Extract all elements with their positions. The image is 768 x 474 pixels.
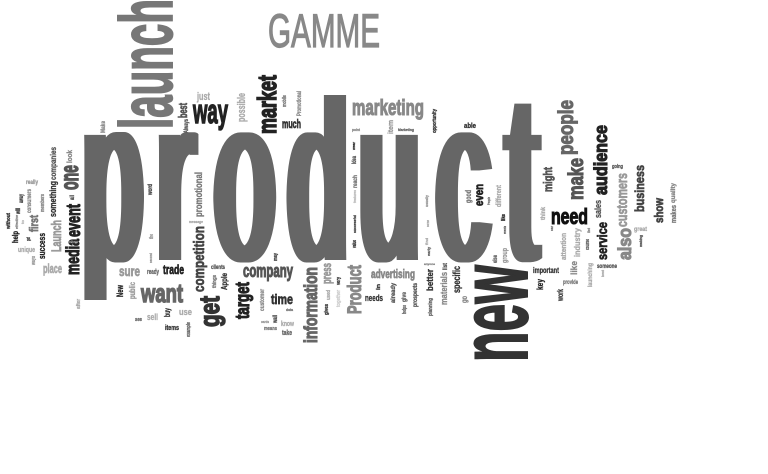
word group: lower centre: anyone (424, 262, 435, 266)
word group: upper left: just (196, 91, 210, 103)
word group: upper left: mobile (282, 95, 288, 107)
word group: far left cluster: consumers (27, 189, 33, 213)
word group: lower left: get (194, 296, 225, 327)
word group: right cluster: list (586, 227, 591, 233)
word group: right cluster: service (594, 222, 610, 260)
word group: upper centre: wear (351, 142, 356, 151)
word group: inside letters left: second (148, 253, 153, 263)
word group: upper centre: opportunity (432, 109, 438, 133)
word group: lower centre: cards (261, 319, 270, 324)
word group: lower left: trade (163, 262, 184, 277)
word group: right cluster: show (652, 197, 666, 223)
word group: right cluster: attention (561, 233, 568, 260)
word group: lower left: clients (211, 265, 225, 271)
word group: right cluster: great (634, 227, 647, 233)
word group: lower left: example (186, 322, 192, 337)
word group: upper centre: even (472, 184, 486, 206)
word group: upper centre: Marketing (398, 127, 414, 132)
word group: right cluster: business (632, 165, 647, 212)
word group: upper centre: successful (352, 215, 357, 233)
word group: right cluster: work (556, 289, 565, 302)
word group: lower centre: target (233, 282, 254, 319)
word group: right cluster: someone (597, 264, 618, 270)
word group: right cluster: quality (671, 182, 677, 203)
word group: far left cluster: first (27, 215, 41, 232)
word group: right cluster: makes (671, 205, 678, 223)
word group: right cluster: customers (614, 173, 631, 227)
word group: lower centre: advertising (371, 267, 415, 281)
word group: right cluster: car (549, 226, 554, 231)
word group: upper centre: usually (424, 194, 429, 207)
word group: far left cluster: media (63, 238, 83, 275)
word group: right cluster: making (638, 235, 643, 247)
word group: far left cluster: effective (14, 214, 19, 229)
word group: upper left: market (252, 75, 282, 134)
word group: lower centre: press (319, 263, 334, 284)
word group: right cluster: also (615, 228, 635, 260)
word group: right cluster: launching (588, 263, 594, 287)
word group: upper centre: early (426, 246, 431, 256)
word group: upper centre: like (501, 214, 507, 221)
word group: right cluster: like (569, 261, 579, 275)
word group: lower centre: take (282, 330, 292, 337)
word group: right cluster: provide (563, 280, 578, 286)
word group: inside letters left: message (189, 219, 204, 224)
word group: lower centre: planning (428, 298, 434, 316)
word group: lower centre: customer (260, 288, 266, 311)
word group: far left cluster: place (43, 261, 62, 276)
title: GAMME: GAMME (268, 4, 380, 57)
word group: far left cluster: companies (49, 147, 58, 180)
word group: right cluster: industry (573, 227, 582, 257)
word group: far left cluster: something (48, 181, 58, 217)
word group: upper centre: marketing (352, 95, 424, 120)
word group: upper centre: value (352, 240, 358, 248)
word group: right cluster: sales (593, 200, 603, 218)
word group: inside letters left: word (148, 184, 154, 196)
word group: far left cluster: away (19, 194, 25, 203)
word group: lower centre: give (402, 291, 408, 302)
word group: lower left: items (165, 325, 179, 332)
word group: upper centre: features (352, 189, 357, 203)
word group: right cluster: going (612, 164, 623, 170)
word group: lower left: ready (147, 269, 159, 276)
word group: lower centre: needs (365, 293, 383, 303)
word group: far left cluster (6, 147, 85, 276)
word group: lower centre: in (376, 284, 382, 290)
word group: upper centre (351, 95, 509, 263)
word group: far left cluster: others (69, 239, 79, 244)
word group: far left cluster: Launch (48, 220, 64, 252)
word: new: new (439, 265, 548, 362)
word group: upper centre: events (502, 226, 507, 234)
word group: lower centre: may (273, 253, 279, 261)
word group: upper left: possible (236, 93, 248, 122)
word group: right cluster: people (555, 100, 578, 155)
word group: upper left: Promotional (297, 91, 303, 116)
word group: far left cluster: look (67, 150, 74, 163)
word group: far left cluster: without (6, 213, 12, 230)
word group: inside letters left: promotional (194, 172, 205, 217)
word group: upper centre: different (496, 184, 503, 207)
word group: lower centre: Product (345, 265, 366, 314)
word group: upper centre: good (464, 190, 473, 203)
word group: lower centre: wall (273, 315, 279, 324)
word group: upper centre: else (493, 255, 499, 263)
word group: upper left (101, 75, 303, 134)
word group: far left cluster: help (11, 231, 20, 243)
word group: upper centre: idea (352, 156, 358, 164)
word group: lower centre: list (443, 263, 449, 270)
word group: upper left: much (282, 117, 301, 131)
word group: right cluster: think (541, 206, 547, 220)
word group: lower left: use (179, 307, 192, 317)
word group: lower centre: time (271, 291, 293, 307)
word group: lower centre: used (326, 290, 332, 300)
word group: upper left: way (192, 93, 228, 131)
word group: upper centre: group (502, 248, 509, 263)
word group: lower centre: company (243, 261, 293, 281)
word group: lower centre: better (425, 269, 435, 291)
word group: lower left: buy (163, 308, 172, 317)
word group: far left cluster: unique (18, 247, 35, 254)
word group: lower centre: gives (324, 304, 330, 315)
word group: far left cluster: really (26, 180, 39, 186)
word group: far left cluster: success (37, 233, 47, 259)
word group: lower centre: go (460, 296, 469, 303)
word group: right cluster: best (600, 269, 605, 277)
word group: lower left: after (76, 299, 82, 309)
word group: lower left: Apple (220, 273, 229, 290)
word group: lower centre: helps (402, 305, 408, 314)
word group: lower left: public (128, 282, 137, 299)
word: product: product (81, 36, 540, 318)
word group: inside letters left (148, 172, 205, 263)
word group: right cluster: make (565, 158, 588, 200)
word group: upper centre: reach (353, 175, 359, 188)
word group: far left cluster: event (64, 204, 85, 237)
word group: far left cluster: ways (31, 256, 37, 266)
word group: far left cluster: will (16, 208, 22, 215)
word group: upper centre: People (486, 197, 491, 205)
word group: lower centre: specific (452, 266, 463, 293)
word group: lower centre: know (281, 321, 294, 328)
word group: upper left: Make (101, 120, 107, 133)
word group: right cluster: might (541, 167, 555, 192)
word group: far left cluster: members (40, 194, 46, 212)
word group: far left cluster: all (70, 195, 76, 200)
word group: upper centre: some (425, 219, 430, 227)
word group: lower left: see (135, 317, 142, 323)
word group: lower left: sell (147, 312, 158, 322)
word group: lower left: want (140, 278, 183, 308)
word group: lower left: competition (191, 226, 208, 292)
word group: upper centre: point (352, 127, 361, 132)
word group: lower left: sure (119, 263, 140, 279)
word group: lower centre: prospects (413, 282, 419, 307)
word group: right cluster: need (551, 204, 588, 229)
word group: lower centre: together (336, 290, 342, 307)
word group: right cluster (533, 100, 678, 302)
word group: right cluster: audience (591, 125, 611, 195)
word group: right cluster: important (533, 266, 559, 275)
word cloud (6, 1, 677, 360)
word group: lower left (76, 226, 229, 337)
word group: lower centre: materials (439, 272, 449, 305)
word group: upper centre: item (388, 120, 395, 134)
word group: lower left: things (212, 275, 218, 288)
word group: far left cluster: to (20, 219, 25, 224)
word group: upper centre: able (464, 123, 476, 130)
word group: lower centre: already (391, 282, 397, 303)
word group: upper centre: find (424, 237, 429, 245)
word group: right cluster: key (535, 279, 545, 290)
word group: right cluster: course (585, 239, 591, 250)
word group: lower centre: information (301, 267, 321, 343)
word group: inside letters left: the (149, 234, 155, 239)
word group: lower centre: means (264, 326, 277, 332)
word group: lower centre: data (286, 307, 294, 312)
word group: lower left: New (115, 284, 125, 297)
word group: upper left: best (176, 103, 190, 118)
word group: lower centre: very (336, 277, 342, 285)
word group: far left cluster: get (26, 237, 32, 241)
word group: lower centre (233, 253, 469, 343)
word group: far left cluster: one (56, 165, 84, 190)
word group: upper left: Always (184, 119, 190, 133)
